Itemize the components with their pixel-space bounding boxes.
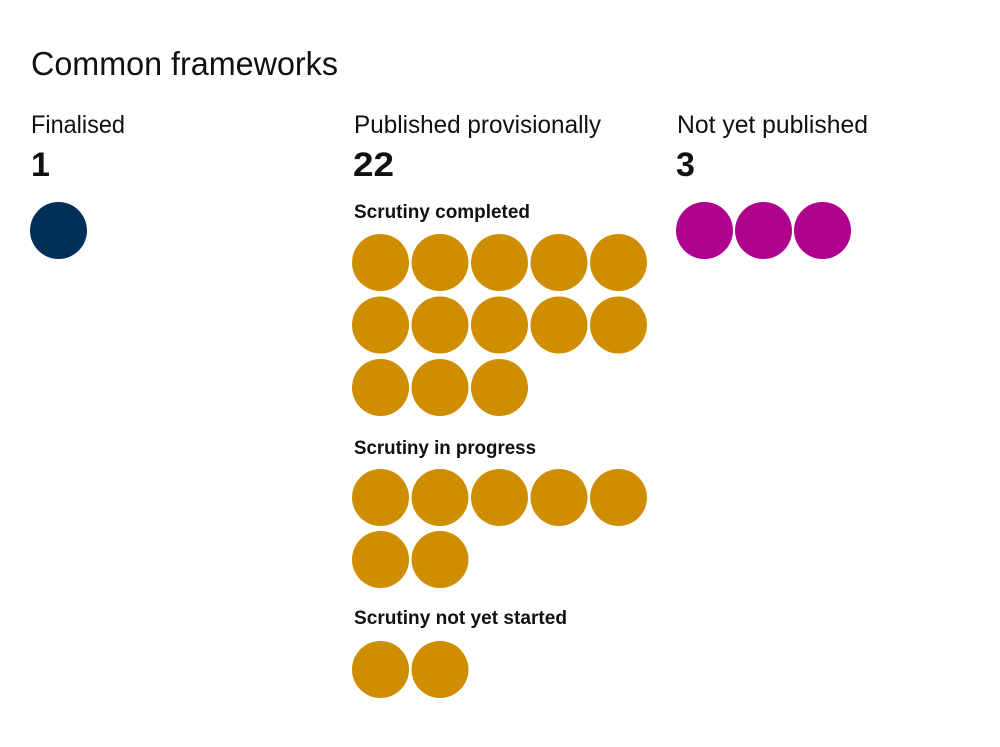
- panel: published provisionally: [352, 111, 647, 698]
- dots: scrutiny completed: [352, 234, 647, 416]
- number: finalised: 1: [31, 146, 50, 184]
- dot: finalised: [30, 202, 87, 259]
- number: not yet published: 3: [676, 146, 695, 184]
- dots: not yet published: [676, 202, 851, 259]
- panel: finalised: [30, 111, 125, 259]
- dots: scrutiny not yet started: [352, 641, 468, 698]
- title: Common frameworks: [31, 45, 338, 82]
- panel: not yet published: [676, 111, 868, 259]
- heading: not yet published: Not yet published: [677, 111, 868, 139]
- subheading: scrutiny not yet started: Scrutiny not yet started: [354, 608, 567, 629]
- subheading: scrutiny in progress: Scrutiny in progress: [354, 438, 536, 459]
- dots: scrutiny in progress: [352, 469, 647, 588]
- subheading: scrutiny completed: Scrutiny completed: [354, 202, 530, 223]
- heading: finalised: Finalised: [31, 111, 125, 139]
- number: published provisionally: 22: [353, 146, 394, 184]
- heading: published provisionally: Published provisionally: [354, 111, 601, 139]
